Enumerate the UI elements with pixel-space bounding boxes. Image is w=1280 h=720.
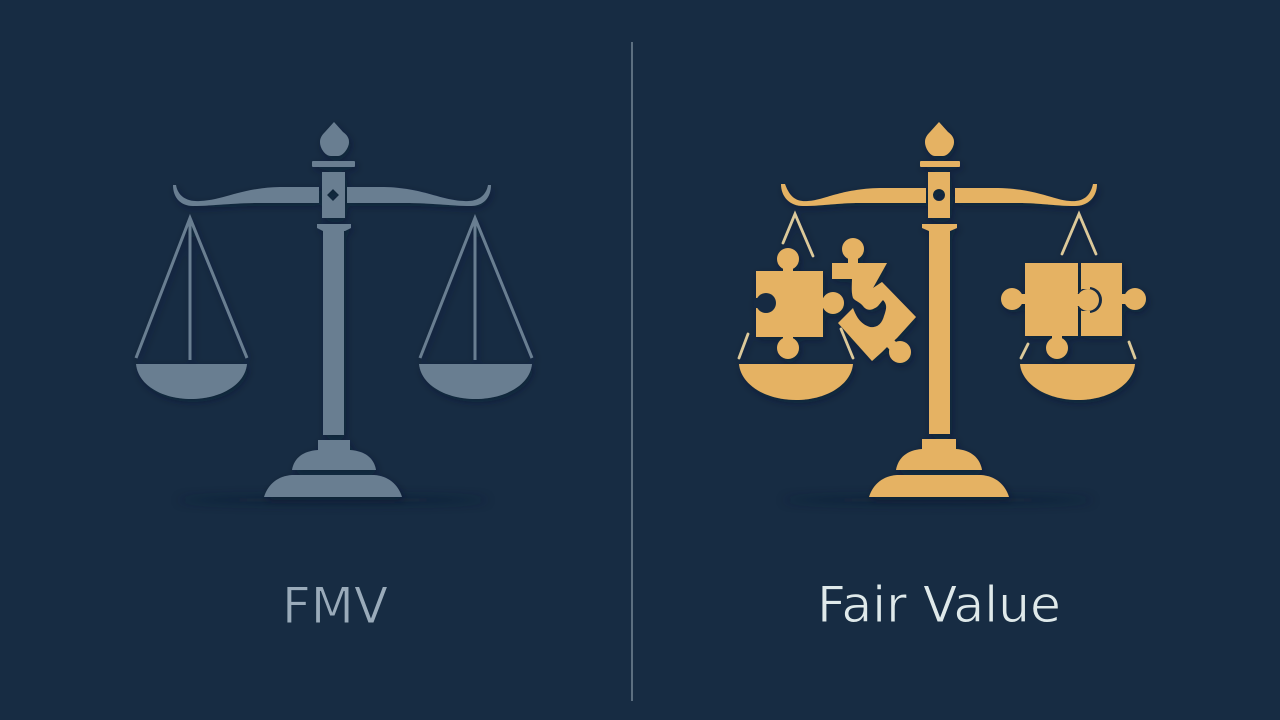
scale strings xyxy=(739,214,1135,358)
puzzle piece: tilted pieces xyxy=(832,238,916,363)
puzzle piece: left square xyxy=(754,248,844,359)
panel: FMV scale xyxy=(136,122,532,635)
label: FMV: FMV xyxy=(282,577,388,635)
icon: gold balance scale xyxy=(739,122,1146,497)
center divider xyxy=(631,42,633,701)
label: Fair Value: Fair Value xyxy=(817,576,1061,634)
icon: grey balance scale xyxy=(136,122,532,497)
ground shadow: Fair Value xyxy=(783,496,1093,504)
puzzle piece: joined pair xyxy=(1001,263,1146,359)
ground shadow: FMV xyxy=(178,496,488,504)
panel: Fair Value scale xyxy=(739,122,1146,634)
